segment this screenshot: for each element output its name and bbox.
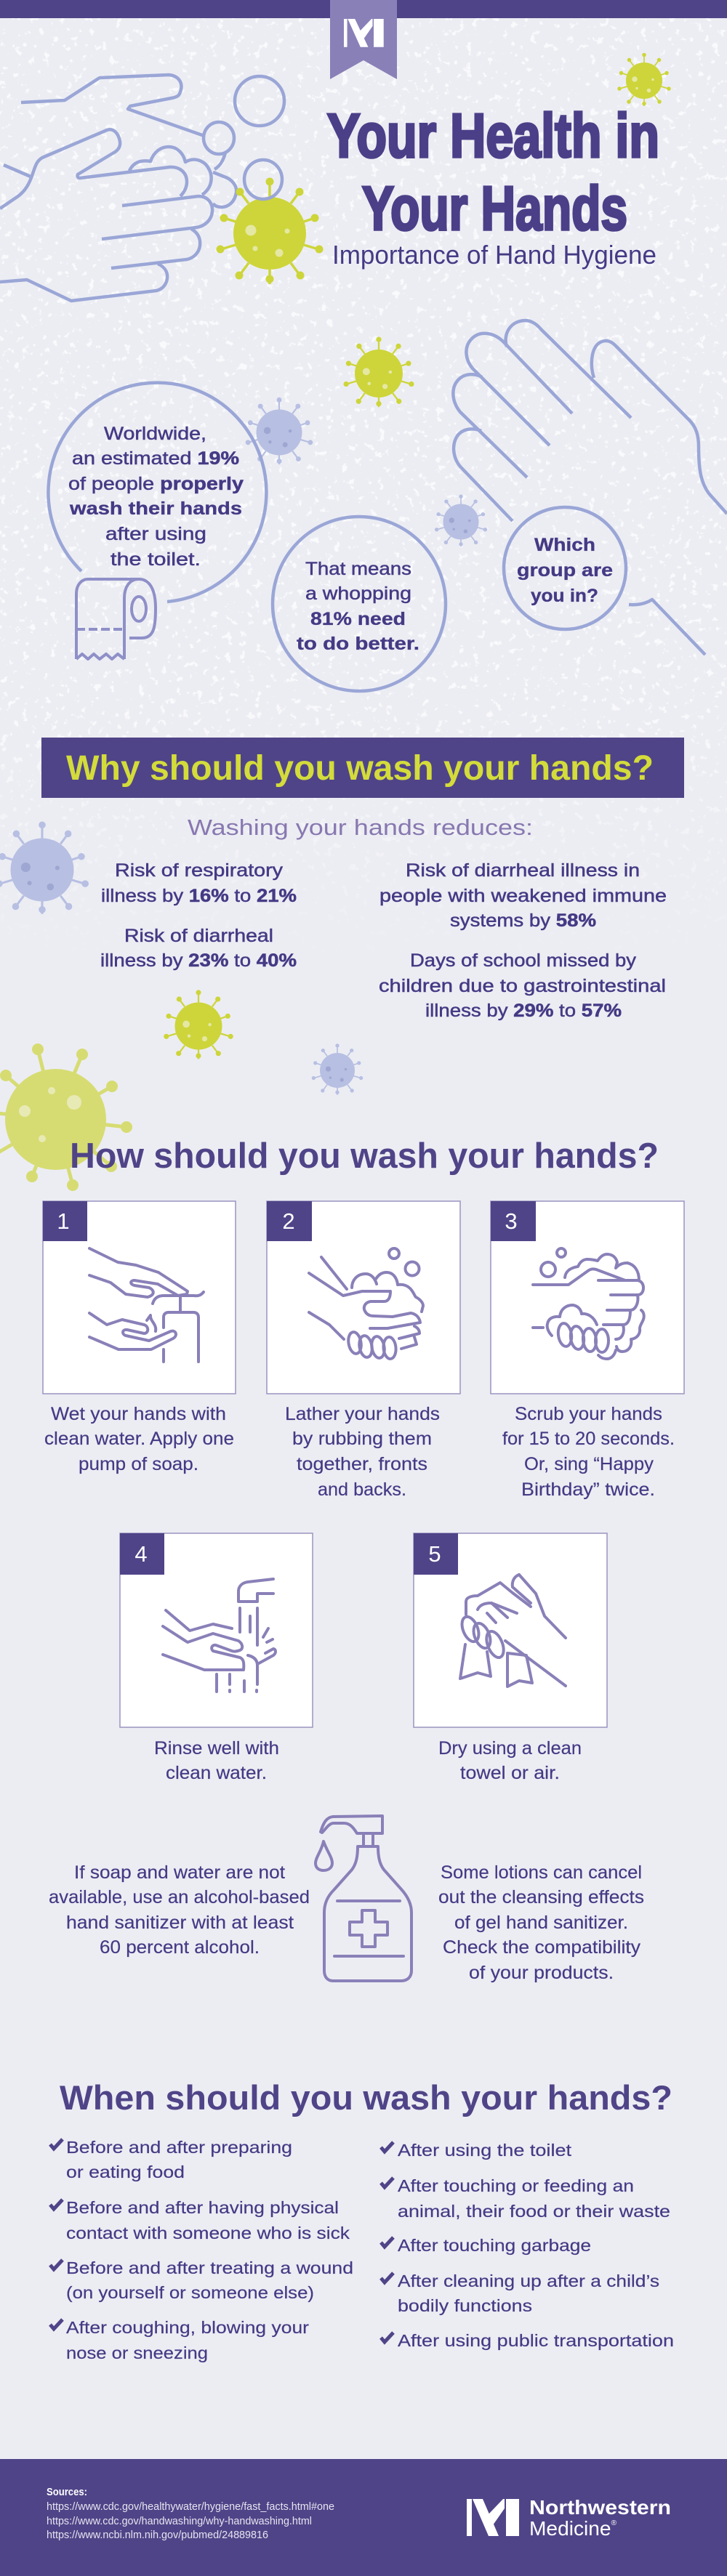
- banner: why: Why should you wash your hands?: [66, 749, 654, 788]
- logo wordmark: [529, 2496, 671, 2540]
- stats left column: illness by 16% to 21%: [101, 886, 297, 906]
- sanitizer text right: of gel hand sanitizer.: [454, 1913, 628, 1933]
- icon: virus large faded: [0, 1043, 132, 1191]
- checklist left: nose or sneezing: [66, 2343, 208, 2362]
- speech bubble: which group: group are: [517, 560, 613, 581]
- icon: pump soap: [89, 1248, 204, 1362]
- step 3 text: Birthday” twice.: [521, 1479, 655, 1500]
- sanitizer text left: hand sanitizer with at least: [66, 1913, 294, 1933]
- icon: drying hands: [459, 1575, 566, 1687]
- sources: https://www.ncbi.nlm.nih.gov/pubmed/24889816: [47, 2529, 268, 2541]
- step 5 text: Dry using a clean: [438, 1738, 582, 1759]
- speech bubble: worldwide: after using: [105, 524, 206, 544]
- subheading: Washing your hands reduces:: [188, 815, 533, 840]
- checklist left: (on yourself or someone else): [66, 2283, 314, 2302]
- checklist right: After using public transportation: [398, 2331, 674, 2350]
- speech bubble: which group: Which: [534, 535, 595, 555]
- step 3 text: Scrub your hands: [515, 1404, 662, 1424]
- step 4 card: 4: [134, 1541, 148, 1567]
- ribbon with logo: [330, 0, 397, 79]
- checklist left: After coughing, blowing your: [66, 2318, 309, 2337]
- checklist left: contact with someone who is sick: [66, 2224, 350, 2242]
- checklist right: bodily functions: [398, 2296, 532, 2315]
- logo mark: [467, 2499, 519, 2536]
- heading: how: How should you wash your hands?: [70, 1136, 659, 1176]
- speech bubble: worldwide: an estimated 19%: [72, 448, 239, 469]
- speech bubble: which group: you in?: [531, 586, 598, 606]
- sanitizer text left: If soap and water are not: [74, 1862, 285, 1883]
- speech bubble: worldwide: the toilet.: [111, 549, 201, 570]
- stats right column: children due to gastrointestinal: [379, 976, 666, 996]
- stats right column: people with weakened immune: [379, 886, 667, 906]
- icon: scrub: [533, 1248, 644, 1359]
- icon: sanitizer bottle: [316, 1816, 411, 1981]
- step 4 text: [154, 1738, 279, 1783]
- checklist right: [381, 2141, 674, 2350]
- step 2 text: [285, 1404, 440, 1500]
- step 1 card: [43, 1201, 236, 1474]
- top bar: [0, 0, 727, 18]
- stats right column: [379, 860, 667, 1021]
- step 5 card: [414, 1533, 607, 1783]
- sources: [47, 2486, 334, 2541]
- icon: lather: [309, 1248, 423, 1360]
- sanitizer text right: out the cleansing effects: [438, 1887, 644, 1907]
- step 5 text: towel or air.: [460, 1763, 560, 1783]
- step 2 text: Lather your hands: [285, 1404, 440, 1424]
- logo wordmark: Northwestern: [529, 2496, 671, 2519]
- speech bubble: whopping: 81% need: [310, 609, 406, 629]
- checklist left: or eating food: [66, 2163, 185, 2181]
- icon: virus yellow lower: [164, 990, 233, 1059]
- title: Your Hands: [362, 174, 627, 243]
- step 3 text: [502, 1404, 675, 1500]
- checklist right: After cleaning up after a child’s: [398, 2272, 659, 2290]
- heading: when: When should you wash your hands?: [60, 2078, 672, 2117]
- checklist right: After touching or feeding an: [398, 2176, 634, 2195]
- speech bubble: whopping: That means: [305, 559, 411, 579]
- sanitizer text left: [49, 1862, 310, 1958]
- stats right column: Risk of diarrheal illness in: [406, 860, 640, 881]
- stats left column: Risk of respiratory: [115, 860, 284, 881]
- step 2 text: and backs.: [318, 1479, 406, 1500]
- stats right column: illness by 29% to 57%: [425, 1001, 622, 1021]
- speech bubble: which group: [504, 507, 626, 629]
- sanitizer text left: 60 percent alcohol.: [100, 1937, 260, 1958]
- step 4 card: [120, 1533, 313, 1783]
- icon: virus yellow large: [217, 177, 323, 284]
- step 1 text: clean water. Apply one: [44, 1429, 234, 1449]
- step 5 text: [438, 1738, 582, 1783]
- stats left column: Risk of diarrheal: [124, 926, 273, 946]
- stats left column: [100, 860, 297, 971]
- step 3 card: 3: [505, 1208, 518, 1234]
- stats right column: systems by 58%: [450, 911, 596, 931]
- icon: virus purple left: [0, 821, 89, 914]
- step 2 card: [267, 1201, 460, 1500]
- sanitizer text left: available, use an alcohol-based: [49, 1887, 310, 1907]
- checklist left: Before and after treating a wound: [66, 2258, 353, 2277]
- sources: https://www.cdc.gov/healthywater/hygiene/fast_facts.html#one: [47, 2500, 334, 2513]
- footer: [0, 2459, 727, 2576]
- stats left column: illness by 23% to 40%: [100, 950, 297, 971]
- sanitizer text right: Some lotions can cancel: [441, 1862, 642, 1883]
- checklist left: Before and after having physical: [66, 2198, 339, 2217]
- step 1 text: Wet your hands with: [51, 1404, 226, 1424]
- title: [327, 102, 659, 243]
- checklist right: After touching garbage: [398, 2236, 591, 2255]
- speech bubble: worldwide: of people properly: [68, 474, 244, 494]
- step 4 text: Rinse well with: [154, 1738, 279, 1759]
- step 4 text: clean water.: [166, 1763, 267, 1783]
- stats right column: Days of school missed by: [410, 950, 637, 971]
- speech bubble: worldwide: Worldwide,: [104, 424, 206, 444]
- icon: virus yellow middle: [343, 337, 414, 407]
- sanitizer text right: of your products.: [469, 1963, 614, 1983]
- checklist right: After using the toilet: [398, 2141, 572, 2160]
- sanitizer text right: [438, 1862, 644, 1983]
- speech bubble: whopping: [273, 517, 446, 691]
- step 5 card: 5: [428, 1541, 441, 1567]
- speech bubble: whopping: to do better.: [297, 634, 419, 654]
- icon: virus yellow top right: [617, 53, 671, 106]
- step 2 text: together, fronts: [297, 1454, 427, 1474]
- checklist left: Before and after preparing: [66, 2138, 292, 2157]
- icon: faucet: [163, 1579, 276, 1692]
- sanitizer text right: Check the compatibility: [443, 1937, 641, 1958]
- step 2 text: by rubbing them: [292, 1429, 432, 1449]
- soap bubble: [244, 160, 282, 199]
- illustration: soapy hands: [0, 75, 284, 301]
- step 3 text: Or, sing “Happy: [524, 1454, 654, 1474]
- banner: why: [41, 738, 684, 798]
- checklist right: animal, their food or their waste: [398, 2202, 670, 2221]
- step 1 text: [44, 1404, 234, 1474]
- icon: toilet paper: [76, 579, 156, 659]
- sources: https://www.cdc.gov/handwashing/why-handwashing.html: [47, 2515, 312, 2527]
- subtitle: Importance of Hand Hygiene: [332, 240, 656, 270]
- illustration: open hand: [453, 320, 727, 655]
- checklist left: [50, 2138, 353, 2362]
- logo wordmark: ®: [611, 2519, 617, 2527]
- icon: virus purple 2: [435, 495, 487, 546]
- icon: virus purple 1: [246, 397, 313, 464]
- icon: virus purple lower: [312, 1043, 363, 1095]
- step 1 card: 1: [57, 1208, 70, 1234]
- step 1 text: pump of soap.: [79, 1454, 198, 1474]
- step 3 card: [491, 1201, 684, 1500]
- step 2 card: 2: [282, 1208, 295, 1234]
- sources: Sources:: [47, 2486, 87, 2498]
- logo wordmark: Medicine: [529, 2517, 611, 2540]
- speech bubble: worldwide: wash their hands: [69, 498, 242, 519]
- speech bubble: worldwide: [48, 383, 266, 602]
- speech bubble: whopping: a whopping: [305, 584, 411, 604]
- step 3 text: for 15 to 20 seconds.: [502, 1429, 675, 1449]
